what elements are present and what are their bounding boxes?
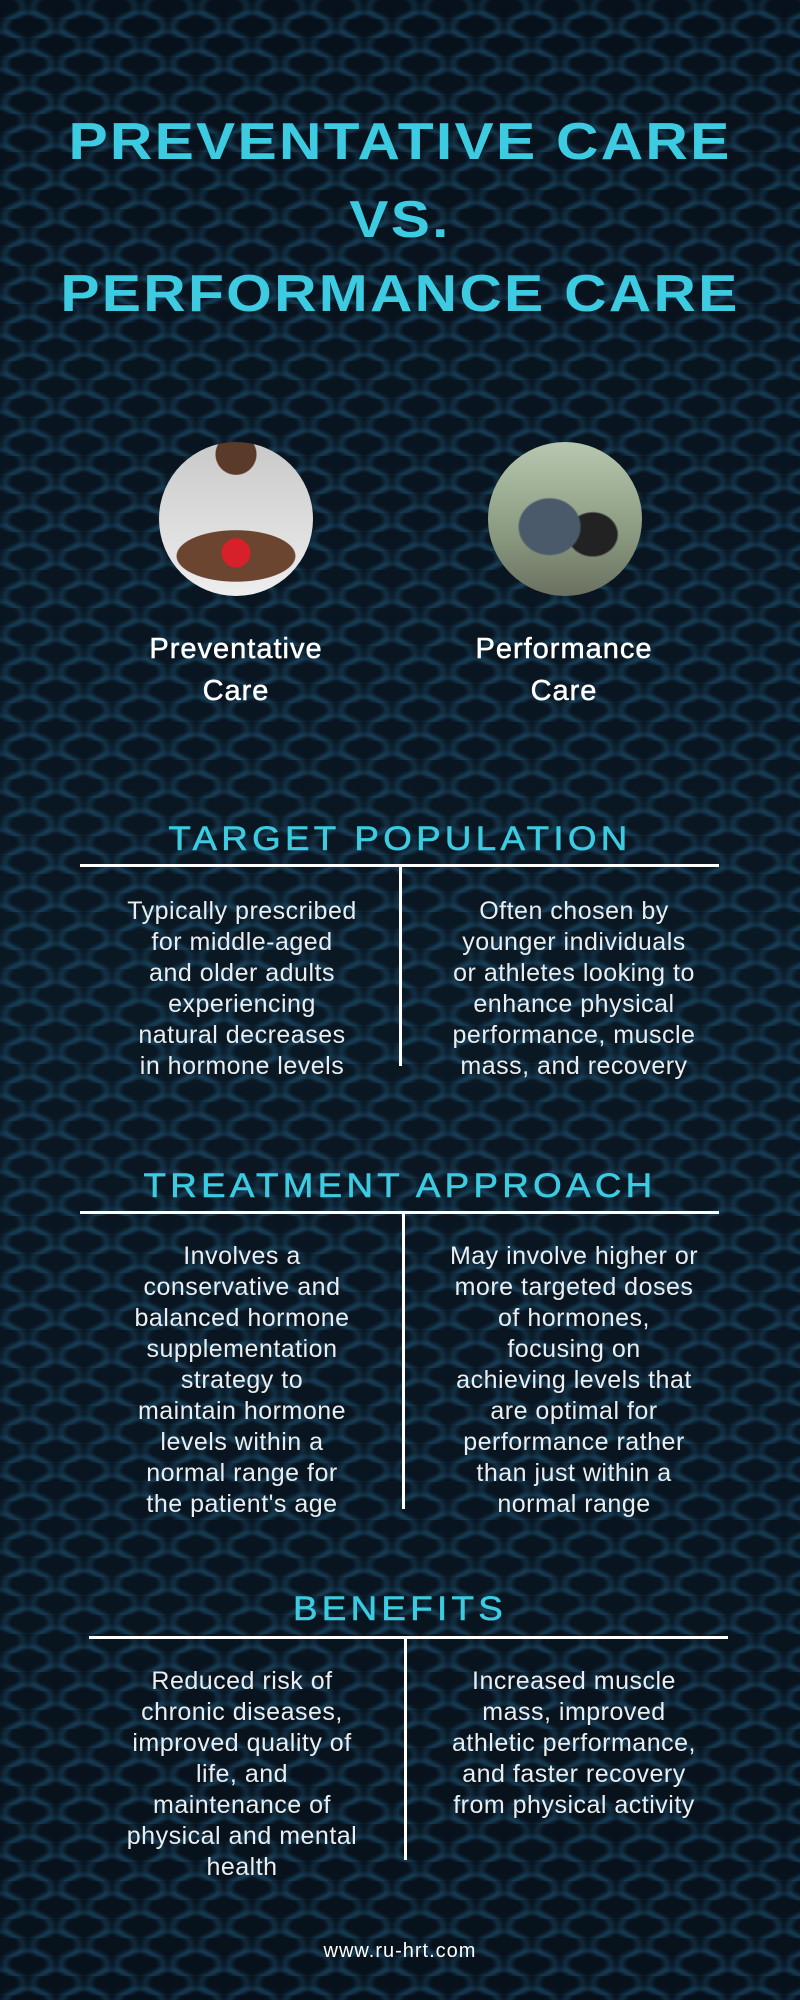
text: treatment left	[134, 1242, 350, 1518]
text: benefits left: physical and mental	[127, 1822, 357, 1850]
text: treatment right: May involve higher or	[450, 1242, 698, 1270]
text: benefits left: maintenance of	[153, 1791, 331, 1819]
text: benefits right: from physical activity	[453, 1791, 695, 1819]
text: treatment right: than just within a	[476, 1459, 672, 1487]
icon: athletes photo	[488, 442, 642, 596]
text: benefits left: improved quality of	[132, 1729, 352, 1757]
text: benefits right: Increased muscle	[472, 1667, 676, 1695]
text: treatment right: of hormones,	[498, 1304, 650, 1332]
label: performance care	[475, 633, 652, 707]
text: target right: younger individuals	[462, 928, 686, 956]
text: target right: or athletes looking to	[453, 959, 695, 987]
text: target right: Often chosen by	[479, 897, 669, 925]
text: target right: mass, and recovery	[460, 1052, 688, 1080]
text: benefits right: athletic performance,	[452, 1729, 696, 1757]
heading: target population: TARGET POPULATION	[168, 820, 632, 858]
label: preventative care: Care	[203, 675, 269, 707]
label: preventative care	[149, 633, 323, 707]
heading: benefits: BENEFITS	[293, 1590, 507, 1628]
title	[60, 113, 740, 323]
text: target right: enhance physical	[473, 990, 675, 1018]
text: benefits right: and faster recovery	[462, 1760, 686, 1788]
text: target left: Typically prescribed	[127, 897, 357, 925]
text: treatment left: maintain hormone	[138, 1397, 346, 1425]
text: target right	[453, 897, 695, 1080]
text: treatment left: levels within a	[160, 1428, 324, 1456]
text: treatment right: performance rather	[463, 1428, 685, 1456]
title: PREVENTATIVE CARE	[68, 113, 732, 171]
title: VS.	[349, 191, 451, 249]
text: treatment right: more targeted doses	[455, 1273, 693, 1301]
icon: doctor photo	[159, 442, 313, 596]
text: benefits right	[452, 1667, 696, 1819]
label: preventative care: Preventative	[149, 633, 323, 665]
text: treatment left: normal range for	[146, 1459, 338, 1487]
text: benefits right: mass, improved	[482, 1698, 666, 1726]
text: treatment left: balanced hormone	[134, 1304, 350, 1332]
text: target left: in hormone levels	[140, 1052, 344, 1080]
label: performance care: Care	[531, 675, 597, 707]
text: treatment right: normal range	[497, 1490, 651, 1518]
text: benefits left: life, and	[196, 1760, 288, 1788]
text: treatment left: strategy to	[181, 1366, 303, 1394]
text: benefits left	[127, 1667, 357, 1881]
text: benefits left: health	[206, 1853, 278, 1881]
footer: www.ru-hrt.com	[324, 1940, 476, 1962]
text: target right: performance, muscle	[453, 1021, 695, 1049]
text: treatment left: supplementation	[147, 1335, 337, 1363]
text: treatment right: achieving levels that	[456, 1366, 692, 1394]
text: benefits left: chronic diseases,	[141, 1698, 343, 1726]
text: treatment left: conservative and	[143, 1273, 340, 1301]
text: target left: natural decreases	[138, 1021, 346, 1049]
text: target left	[127, 897, 357, 1080]
text: target left: for middle-aged	[151, 928, 333, 956]
text: treatment left: the patient's age	[146, 1490, 338, 1518]
text: treatment right: focusing on	[507, 1335, 641, 1363]
text: treatment left: Involves a	[183, 1242, 301, 1270]
text: target left: and older adults	[149, 959, 335, 987]
text: treatment right: are optimal for	[490, 1397, 658, 1425]
text: treatment right	[450, 1242, 698, 1518]
title: PERFORMANCE CARE	[60, 265, 740, 323]
heading: treatment approach: TREATMENT APPROACH	[143, 1167, 657, 1205]
text: benefits left: Reduced risk of	[151, 1667, 333, 1695]
text: target left: experiencing	[168, 990, 316, 1018]
label: performance care: Performance	[475, 633, 652, 665]
